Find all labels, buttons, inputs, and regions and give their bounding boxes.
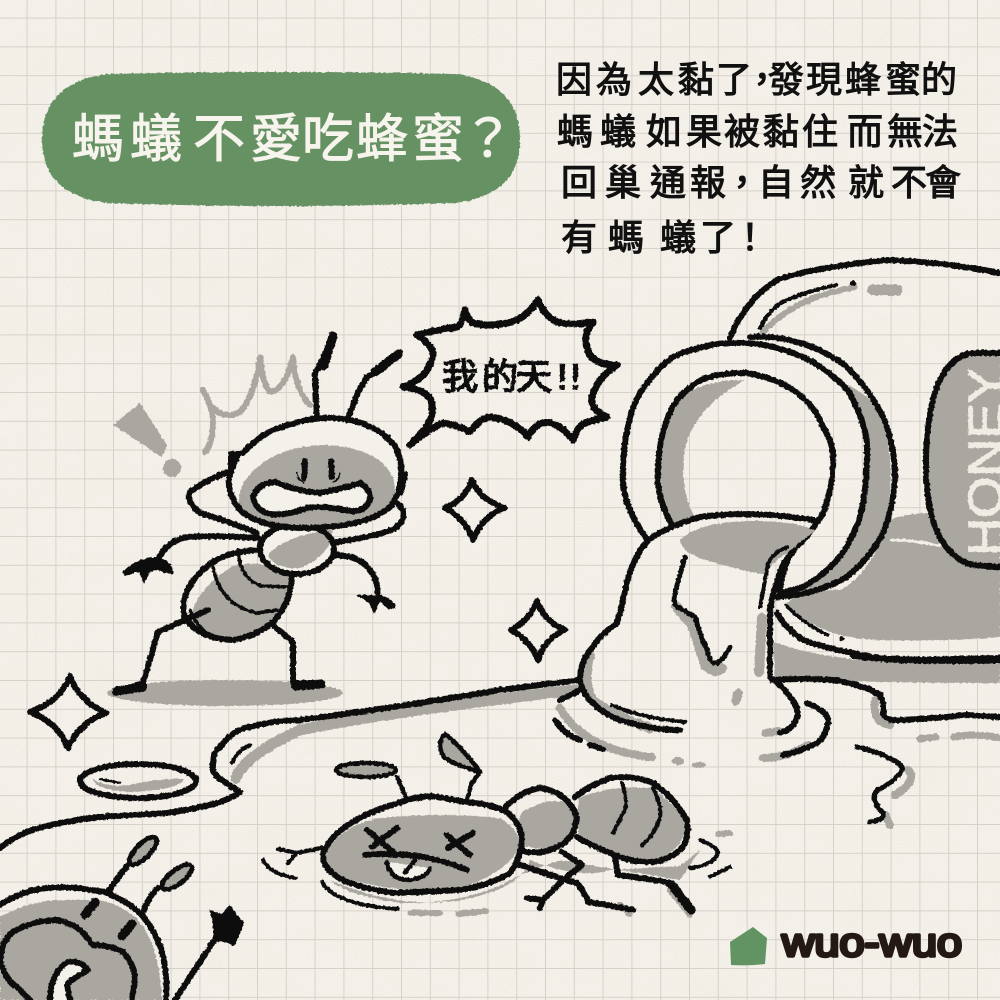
- raised hand: [175, 942, 213, 1000]
- logo house icon: [730, 927, 767, 965]
- antennae: [315, 335, 400, 420]
- honey jar: [623, 260, 1000, 683]
- ant shadow: [107, 680, 343, 706]
- pool right edge: [772, 679, 1000, 720]
- honey pool in mouth of jar: [680, 521, 815, 575]
- X eyes: [367, 828, 473, 855]
- speech bubble: !!: [556, 357, 582, 399]
- pool outline: [0, 680, 580, 848]
- tongue: [50, 962, 88, 1000]
- logo: [730, 921, 962, 965]
- antennae: [107, 865, 158, 912]
- head: [325, 815, 520, 890]
- fallen stuck ant: [263, 734, 730, 915]
- surprised ant: [107, 335, 404, 706]
- jar shadow band: [773, 642, 1000, 683]
- sparkle 2: [511, 601, 565, 660]
- abdomen: [578, 787, 686, 861]
- legs: [520, 852, 670, 910]
- eyes: [85, 902, 132, 936]
- jar rim crescent: [778, 385, 890, 596]
- face line: [0, 920, 135, 1000]
- abdomen: [192, 564, 292, 637]
- shock squiggle: [203, 357, 310, 452]
- jar outlines: [730, 260, 1000, 338]
- title text: 螞蟻不愛吃蜂蜜？: [72, 97, 514, 172]
- head: [232, 418, 401, 528]
- puddle: [80, 764, 196, 798]
- eyes: [304, 461, 332, 478]
- head outline: [0, 887, 166, 1000]
- spilled honey: [0, 514, 1000, 848]
- legs: [115, 610, 322, 692]
- mouth and tongue: [387, 862, 430, 880]
- ripples: [783, 703, 828, 755]
- jar highlight: [763, 287, 855, 332]
- sparkle 3: [30, 676, 106, 748]
- antennae: [397, 772, 480, 800]
- arms and hands: [158, 470, 404, 595]
- head gray: [0, 900, 162, 1000]
- explanatory text: 有螞蟻了！: [561, 209, 768, 261]
- explanatory text: [556, 51, 961, 261]
- explanatory text: 因為太黏了，發現蜂蜜的: [556, 51, 957, 103]
- exclamation text: 我的天: [442, 348, 552, 400]
- sparkle 1: [445, 480, 505, 540]
- honey flow: [580, 514, 813, 730]
- logo wordmark: wuo-wuo: [781, 921, 962, 965]
- ripples: [263, 840, 730, 909]
- explanatory text: 回巢通報，自然就不會: [561, 154, 961, 206]
- title pill: [42, 72, 520, 206]
- inner crescent: [658, 380, 745, 525]
- sparkles: [30, 480, 565, 748]
- exclamation mark: [113, 403, 181, 477]
- honey inside jar: [787, 512, 1000, 641]
- jar label: [926, 353, 1000, 567]
- bottom left ant: [0, 833, 244, 1000]
- thorax: [518, 801, 576, 848]
- fallen ant shadow: [330, 850, 700, 903]
- mouth: [253, 482, 370, 514]
- explanatory text: 螞蟻如果被黏住而無法: [557, 103, 958, 155]
- speech bubble: [403, 300, 617, 445]
- thorax: [260, 524, 334, 574]
- flow shading: [586, 606, 762, 728]
